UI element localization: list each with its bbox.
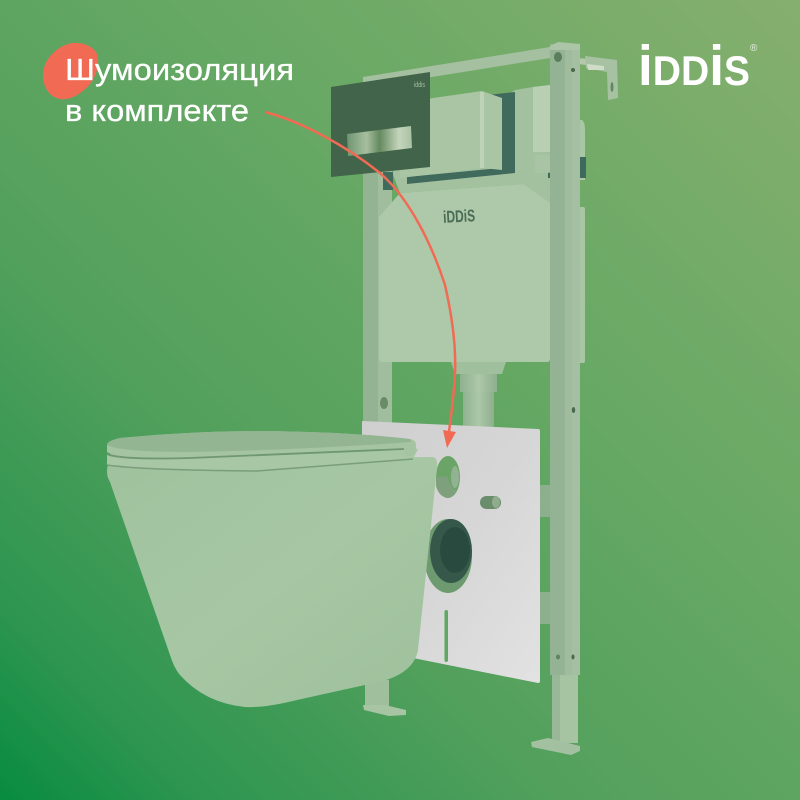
dark bracket on mechanism (548, 157, 586, 178)
flush plate (331, 72, 430, 177)
heading: в комплекте (65, 93, 249, 128)
connecting pipe (451, 362, 506, 434)
cistern body (379, 184, 550, 362)
left leg and foot (363, 680, 406, 716)
installation frame (363, 42, 618, 755)
mechanism body (392, 85, 550, 205)
cistern top box (400, 91, 502, 178)
dark mounting frame (407, 92, 515, 184)
dark block under plate (383, 172, 393, 190)
seat ring (107, 447, 418, 471)
callout arrow (265, 112, 456, 448)
plate logo: iddis (414, 82, 425, 89)
accent blob (43, 43, 98, 99)
toilet seat (107, 431, 418, 471)
light cover plate (533, 85, 550, 152)
flush buttons (347, 126, 412, 156)
top bar (363, 47, 550, 88)
logo on cistern: iDDiS (443, 206, 476, 227)
upper hole (436, 456, 460, 498)
brand logo: iDDiS (638, 34, 750, 98)
seat lid (107, 431, 416, 458)
cross braces behind panel (540, 485, 550, 624)
side slot (480, 496, 501, 509)
heading (65, 52, 294, 128)
heading: Шумоизоляция (65, 52, 294, 87)
right side panel (575, 120, 585, 180)
toilet bowl (107, 457, 437, 707)
slit (444, 610, 448, 662)
brand logo: ® (750, 43, 758, 54)
large hole with pipe socket (424, 519, 472, 593)
wall bracket (579, 56, 618, 100)
sound insulation panel (362, 421, 540, 683)
right post (550, 42, 580, 675)
left post (363, 73, 391, 432)
right leg and foot (531, 675, 580, 755)
